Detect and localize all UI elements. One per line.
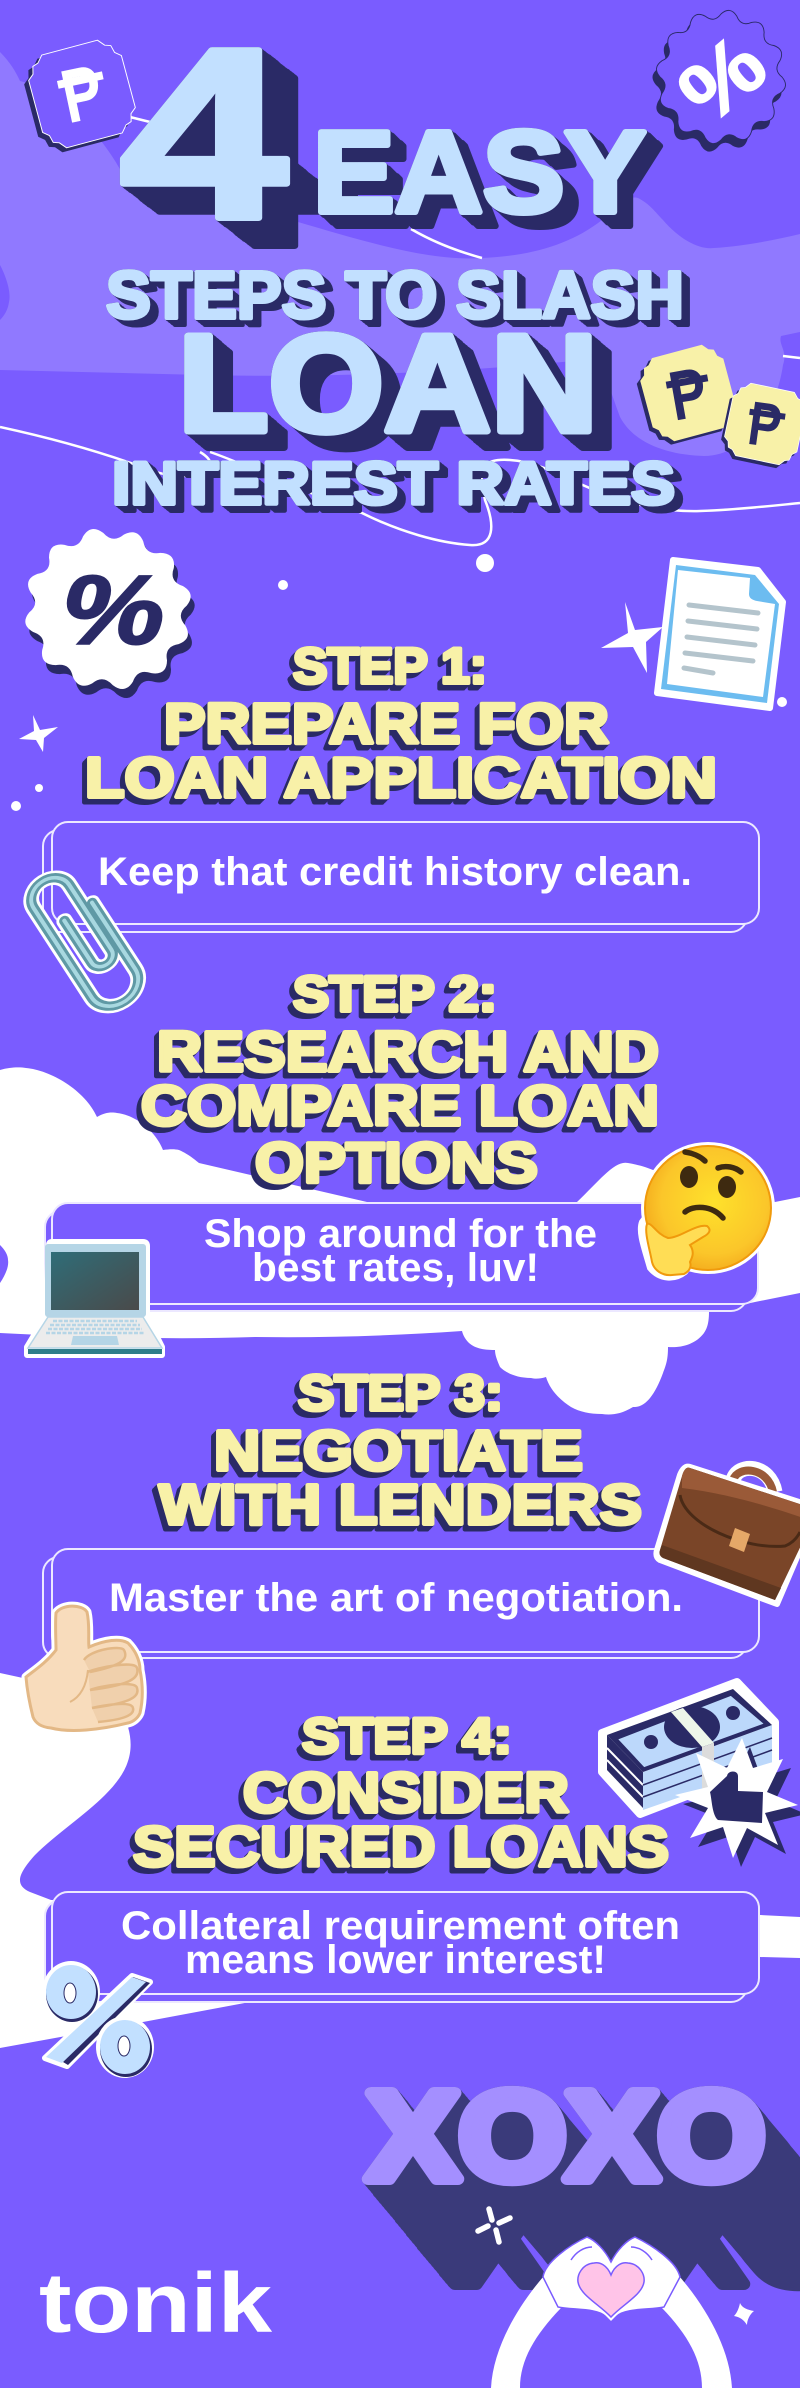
decorative dots xyxy=(11,554,787,811)
icon: laptop xyxy=(27,1242,162,1355)
step 1 heading xyxy=(85,638,717,810)
step 2 text line 2: best rates, luv! xyxy=(252,1246,539,1290)
background notch xyxy=(0,265,10,320)
step 1 title line 1: PREPARE FOR xyxy=(164,692,609,756)
step 2 title line 3: OPTIONS xyxy=(255,1131,538,1195)
step 4 text line 1: Collateral requirement often xyxy=(121,1904,680,1948)
title: LOAN: LOAN xyxy=(178,307,598,461)
icon: thinking face emoji xyxy=(641,1142,775,1278)
step 4 label: STEP 4: xyxy=(302,1708,512,1764)
step 2 title line 2: COMPARE LOAN xyxy=(141,1074,659,1138)
title xyxy=(106,0,684,517)
step 4 title line 1: CONSIDER xyxy=(243,1761,569,1825)
icon: star badge with thumb xyxy=(675,1738,800,1867)
icon: money stack xyxy=(602,1682,775,1814)
step 2 heading xyxy=(141,966,659,1195)
step 1 callout xyxy=(43,822,759,932)
decorative swirl line xyxy=(0,356,800,545)
icon: sparkle on shadow xyxy=(478,2209,510,2242)
background blob: light purple header wave xyxy=(0,52,800,456)
step 1 callout: Keep that credit history clean. xyxy=(98,850,692,894)
white blob behind step 4 xyxy=(0,1673,800,2048)
step 3 callout: Master the art of negotiation. xyxy=(109,1576,683,1620)
icon: big percent xyxy=(42,1961,154,2078)
step 3 title line 2: WITH LENDERS xyxy=(159,1473,642,1537)
icon: paperclip xyxy=(24,865,147,1015)
icon: yellow peso coins: P xyxy=(744,388,786,461)
title: INTEREST RATES: INTEREST RATES xyxy=(112,450,675,517)
icon: peso badge top left xyxy=(19,35,141,157)
step 4 title line 2: SECURED LOANS xyxy=(133,1815,669,1879)
icon: yellow peso coins xyxy=(632,340,800,471)
step 2 label: STEP 2: xyxy=(293,966,497,1022)
decorative line xyxy=(130,117,482,258)
icon: thumbs up xyxy=(26,1606,142,1730)
step 1 label: STEP 1: xyxy=(293,638,487,694)
step 2 callout xyxy=(45,1203,758,1311)
icon: peso badge top left: P xyxy=(54,49,110,140)
icon: document xyxy=(657,560,783,708)
title: big 4: 4 xyxy=(119,0,288,270)
title: EASY: EASY xyxy=(313,107,646,237)
icon: white percent seal xyxy=(10,513,210,714)
step 3 callout xyxy=(43,1549,759,1658)
step 3 label: STEP 3: xyxy=(298,1365,503,1421)
step 4 callout xyxy=(45,1892,759,2002)
icon: sparkle large xyxy=(601,602,663,673)
step 3 heading xyxy=(159,1365,642,1537)
step 1 title line 2: LOAN APPLICATION xyxy=(85,746,717,810)
XOXO wordmark with long shadow: XOXO xyxy=(367,2067,765,2206)
step 4 text line 2: means lower interest! xyxy=(185,1938,606,1982)
icon: briefcase xyxy=(656,1467,800,1604)
white cloud behind step 2 xyxy=(0,1067,800,1414)
tonik logo: tonik xyxy=(39,2256,272,2350)
icon: sparkle small xyxy=(19,715,58,752)
icon: heart hands xyxy=(491,2237,732,2388)
title: STEPS TO SLASH: STEPS TO SLASH xyxy=(106,258,684,333)
icon: percent badge top right: % xyxy=(661,16,784,141)
step 4 heading xyxy=(133,1708,669,1879)
icon: small sparkle xyxy=(734,2303,754,2325)
step 2 title line 1: RESEARCH AND xyxy=(157,1020,659,1084)
icon: yellow peso coins: P xyxy=(664,353,713,436)
icon: white percent seal: % xyxy=(62,555,164,665)
step 2 text line 1: Shop around for the xyxy=(204,1212,597,1256)
step 3 title line 1: NEGOTIATE xyxy=(214,1419,583,1483)
